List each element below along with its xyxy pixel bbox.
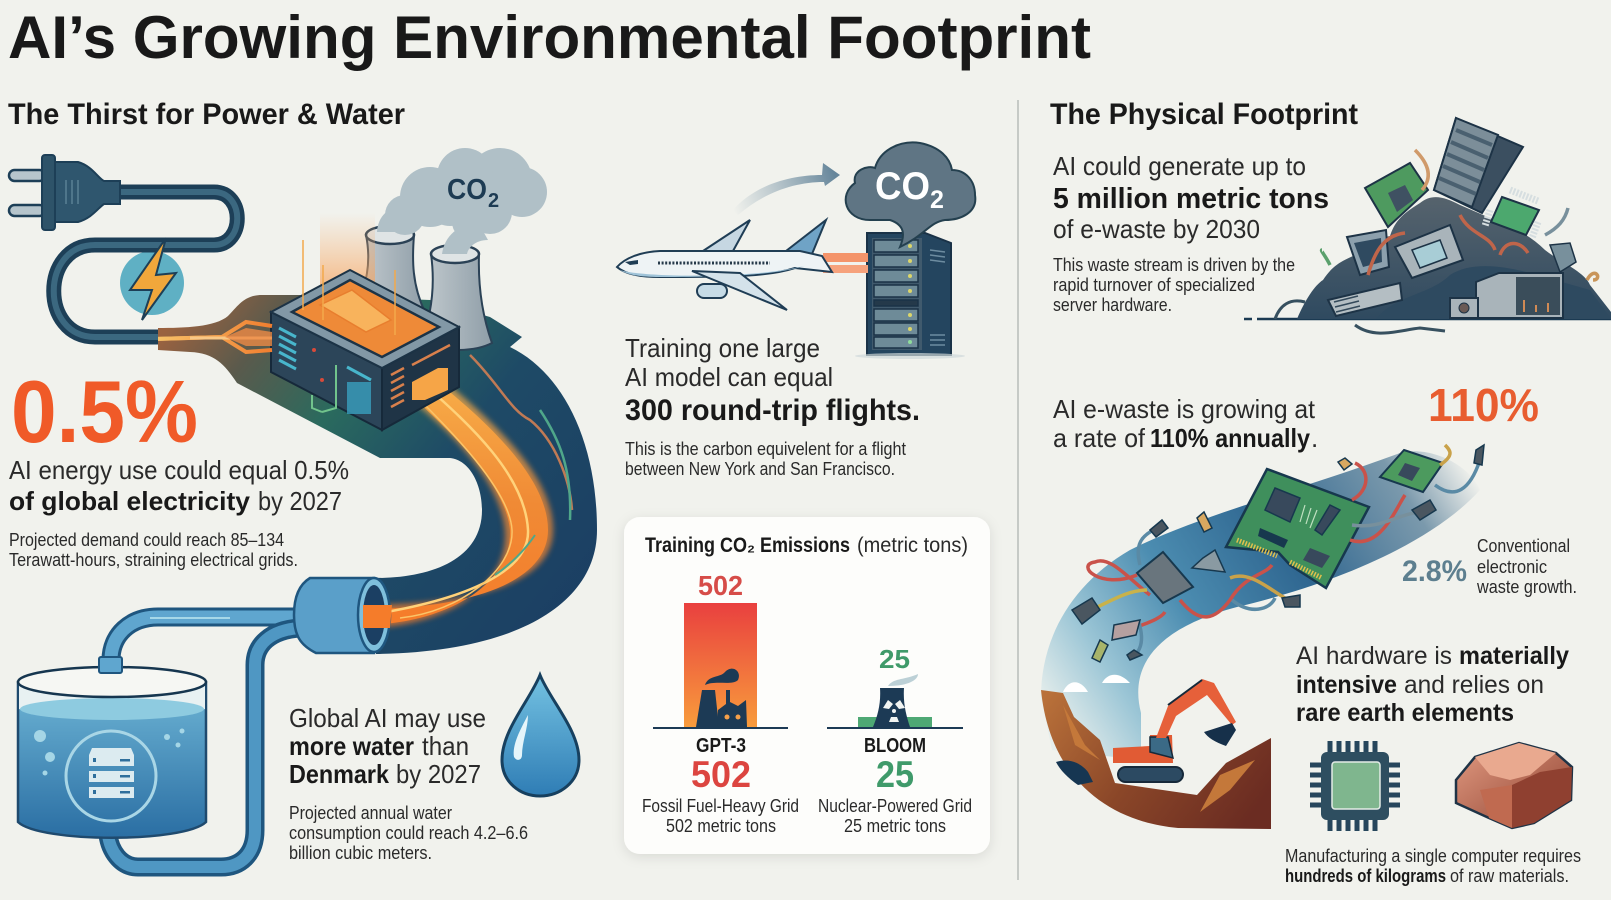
text: rare earth: intensive (1296, 671, 1397, 699)
icon: dark CO2 cloud: CO (875, 165, 930, 208)
chart title: (metric tons) (857, 534, 968, 557)
text: water use: Projected annual water (289, 802, 452, 823)
text: rare earth: materially (1459, 642, 1569, 670)
pipe coupler (294, 578, 392, 653)
text: energy use: by 2027 (258, 486, 342, 516)
text: e-waste tons: AI could generate up to (1053, 151, 1306, 181)
text: e-waste tons: rapid turnover of specialized (1053, 274, 1255, 295)
earth (1041, 690, 1271, 829)
text: e-waste tons (1053, 151, 1329, 315)
server tower (1434, 118, 1523, 213)
text: conventional growth: electronic (1477, 557, 1547, 577)
text: e-waste growth: a rate of (1053, 423, 1146, 453)
text: water use: consumption could reach 4.2–6.6 (289, 822, 528, 843)
tangled cables (1088, 445, 1480, 655)
text: water use: billion cubic meters. (289, 842, 432, 863)
text: water use: more water (289, 731, 414, 761)
text: manufacturing: hundreds of kilograms (1285, 866, 1446, 886)
illustration: mining to e-waste swoosh (1041, 445, 1484, 829)
text: conventional growth (1402, 536, 1577, 597)
thick energy pipe (158, 295, 597, 654)
icon: dark CO2 cloud (846, 142, 975, 247)
smoke cloud with CO2: 2 (488, 190, 499, 212)
heading: the thirst for power and water: The Thirst for Power & Water (8, 98, 405, 131)
text: training flights: AI model can equal (625, 362, 833, 392)
icon: plug and cord (9, 155, 237, 337)
panel: training CO2 emissions chart (624, 517, 990, 854)
heading: the physical footprint: The Physical Footprint (1050, 98, 1358, 131)
text: energy use: Terawatt-hours, straining electrical grids. (9, 549, 298, 570)
text: e-waste tons: of e-waste by 2030 (1053, 214, 1260, 244)
title: AI’s Growing Environmental Footprint (8, 4, 1091, 71)
rack unit (1450, 273, 1563, 318)
text: manufacturing (1285, 846, 1581, 886)
text: energy use (9, 455, 349, 570)
device panel (1395, 225, 1463, 278)
label: BLOOM detail: BLOOM (864, 735, 926, 757)
stat: 110%: 110% (1428, 379, 1539, 431)
icon: dark CO2 cloud: 2 (930, 186, 944, 214)
icon: airplane (617, 220, 868, 310)
cable plugs (1072, 445, 1484, 662)
icon: rare earth rock (1456, 743, 1572, 828)
text: rare earth: AI hardware is (1296, 642, 1452, 670)
label: GPT-3 detail: GPT-3 (696, 735, 746, 757)
label: BLOOM detail: Nuclear-Powered Grid (818, 796, 972, 816)
discarded chip (1550, 243, 1576, 272)
circuit board (1226, 469, 1369, 588)
text: rare earth: rare earth elements (1296, 699, 1514, 727)
illustration: e-waste pile (1244, 118, 1611, 333)
icon: microchip (1310, 741, 1400, 831)
text: manufacturing: Manufacturing a single computer requires (1285, 846, 1581, 866)
label: BLOOM detail: 25 (876, 754, 914, 795)
text: manufacturing: of raw materials. (1450, 866, 1569, 886)
board chip (1388, 185, 1413, 212)
text: conventional growth: Conventional (1477, 536, 1570, 556)
cables (1322, 150, 1598, 280)
monitor (1347, 230, 1389, 275)
text: e-waste growth (1053, 394, 1318, 453)
icon: lightning bolt (130, 238, 176, 320)
bar: BLOOM (858, 644, 932, 727)
excavator (1113, 679, 1236, 782)
text: e-waste tons: 5 million metric tons (1053, 183, 1329, 215)
green circuit board (1365, 163, 1428, 227)
label: GPT-3 detail (642, 735, 799, 836)
text: e-waste tons: This waste stream is driven by the (1053, 254, 1295, 275)
label: GPT-3 detail: Fossil Fuel-Heavy Grid (642, 796, 799, 816)
text: e-waste tons: server hardware. (1053, 294, 1172, 315)
text: training flights: between New York and San Francisco. (625, 458, 895, 479)
icon: water tank with server (18, 657, 206, 838)
grey processor (1137, 552, 1193, 603)
text: e-waste growth: 110% annually (1150, 423, 1310, 453)
illustration: energy pipe and data center (154, 148, 597, 654)
text: rare earth (1296, 642, 1569, 727)
text: water use: than (422, 731, 469, 761)
icon: server tower (855, 233, 965, 359)
label: BLOOM detail (818, 735, 972, 836)
bar: BLOOM: 25 (879, 644, 910, 674)
flat box (1328, 283, 1402, 316)
text: conventional growth: 2.8% (1402, 555, 1467, 588)
text: training flights: Training one large (625, 333, 820, 363)
text: water use: Denmark (289, 759, 389, 789)
label: BLOOM detail: 25 metric tons (844, 816, 946, 836)
stat: 0.5%: 0.5% (11, 362, 198, 461)
chart title: Training CO₂ Emissions (645, 534, 850, 557)
bar: GPT-3 (684, 570, 757, 727)
text: water use: by 2027 (396, 759, 481, 789)
data center building (271, 213, 459, 430)
label: GPT-3 detail: 502 (691, 754, 751, 795)
text: e-waste growth: . (1311, 423, 1318, 453)
text: e-waste growth: AI e-waste is growing at (1053, 394, 1316, 424)
green chip (1485, 190, 1539, 238)
orange energy jet (154, 322, 272, 352)
bar: GPT-3: 502 (698, 570, 743, 601)
text: water use: Global AI may use (289, 703, 486, 733)
text: conventional growth: waste growth. (1476, 577, 1577, 597)
text: energy use: AI energy use could equal 0.5% (9, 455, 349, 485)
smoke cloud with CO2 (377, 148, 547, 254)
cooling towers (358, 226, 492, 350)
icon: water drop (502, 675, 579, 796)
swoosh sky band (1041, 451, 1480, 760)
arrow: flights to emissions (733, 163, 840, 215)
small chip (1380, 450, 1443, 492)
text: energy use: of global electricity (9, 486, 251, 516)
text: water use (289, 703, 528, 863)
label: GPT-3 detail: 502 metric tons (666, 816, 776, 836)
smoke cloud with CO2: CO (447, 174, 487, 206)
clouds (1063, 675, 1130, 692)
text: energy use: Projected demand could reach 85–134 (9, 529, 284, 550)
text: training flights (625, 333, 920, 479)
text: training flights: 300 round-trip flights. (625, 394, 920, 427)
text: training flights: This is the carbon equivelent for a flight (625, 438, 906, 459)
text: rare earth: and relies on (1404, 671, 1544, 699)
illustration: water pipes and coupler (108, 578, 392, 867)
